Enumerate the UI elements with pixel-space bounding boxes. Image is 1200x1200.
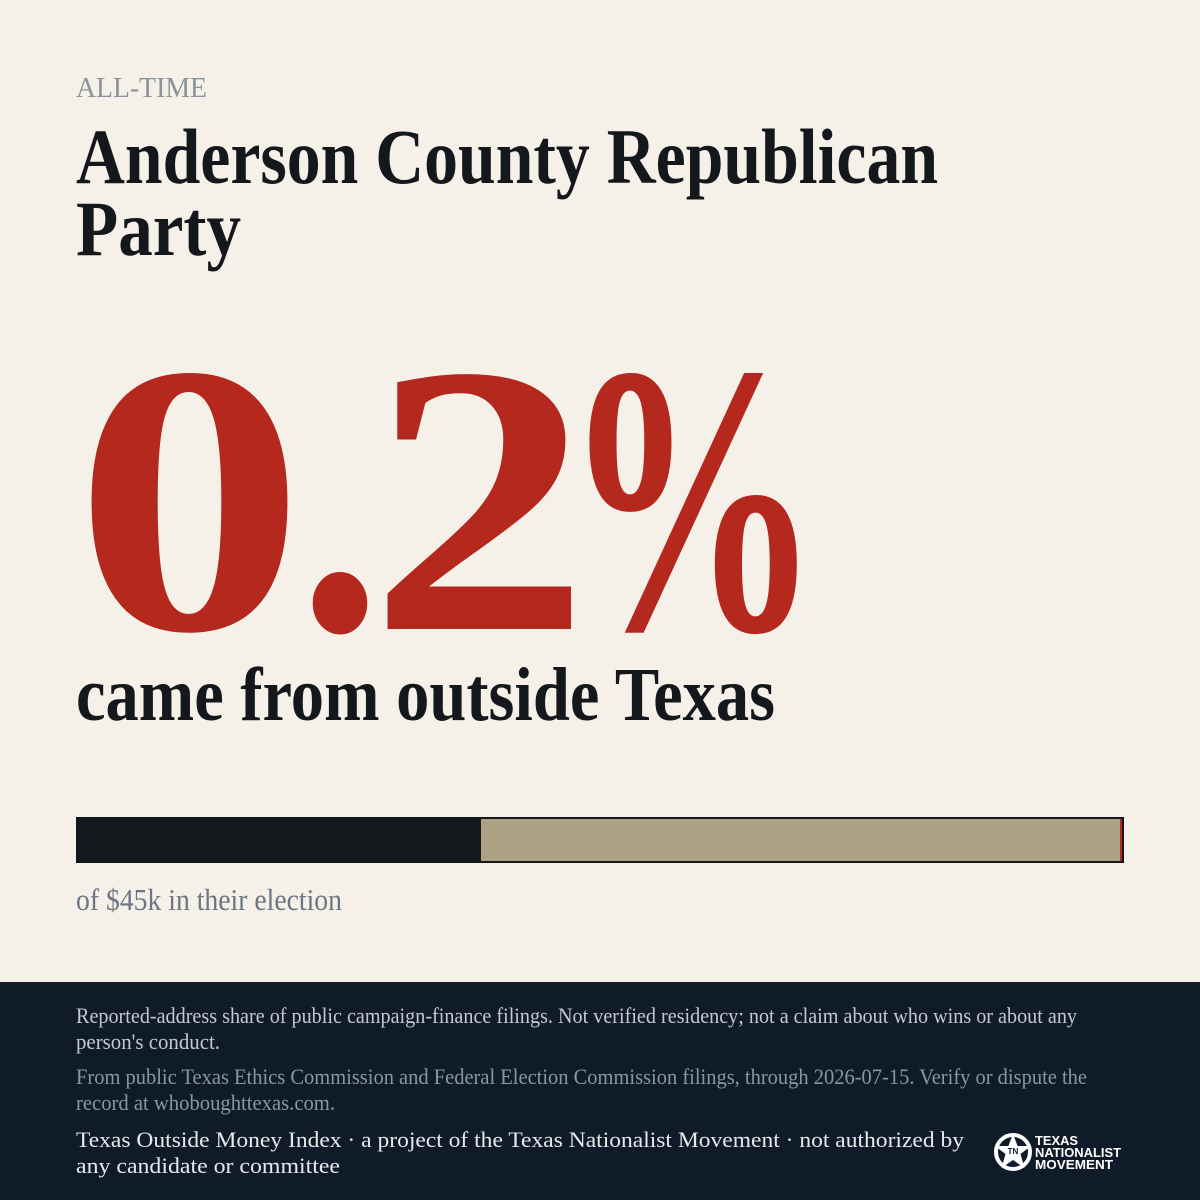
big percentage bbox=[74, 287, 821, 713]
eyebrow label: ALL-TIME bbox=[76, 73, 207, 104]
big percentage: 2 bbox=[369, 287, 590, 713]
footer panel bbox=[0, 982, 1200, 1200]
big percentage: . bbox=[298, 287, 382, 713]
disclaimer text bbox=[76, 1003, 1077, 1054]
logo: Texas Nationalist Movement bbox=[995, 1133, 1121, 1172]
source text: record at whoboughttexas.com. bbox=[76, 1090, 335, 1115]
logo: Texas Nationalist Movement: NATIONALIST bbox=[1035, 1145, 1121, 1160]
bar caption: of $45k in their election bbox=[76, 882, 342, 917]
logo: Texas Nationalist Movement: MOVEMENT bbox=[1035, 1157, 1113, 1172]
disclaimer text: person's conduct. bbox=[76, 1029, 220, 1054]
big percentage: 0 bbox=[74, 287, 305, 713]
attribution text bbox=[76, 1127, 964, 1178]
source text: From public Texas Ethics Commission and Federal Election Commission filings, through 2026-07-15. Verify or dispute the bbox=[76, 1064, 1087, 1089]
stacked bar bbox=[76, 817, 1124, 863]
attribution text: Texas Outside Money Index · a project of the Texas Nationalist Movement · not authorized by bbox=[76, 1127, 964, 1152]
title: Party bbox=[76, 185, 241, 272]
big percentage: % bbox=[563, 287, 821, 713]
source text bbox=[76, 1064, 1087, 1115]
title: Anderson County Republican bbox=[76, 113, 938, 200]
title bbox=[76, 113, 938, 272]
logo: Texas Nationalist Movement: TEXAS bbox=[1035, 1133, 1078, 1148]
subheading: came from outside Texas bbox=[76, 653, 775, 737]
attribution text: any candidate or committee bbox=[76, 1153, 340, 1178]
disclaimer text: Reported-address share of public campaign-finance filings. Not verified residency; not a claim about who wins or about any bbox=[76, 1003, 1077, 1028]
logo: Texas Nationalist Movement: TN bbox=[1008, 1147, 1019, 1156]
